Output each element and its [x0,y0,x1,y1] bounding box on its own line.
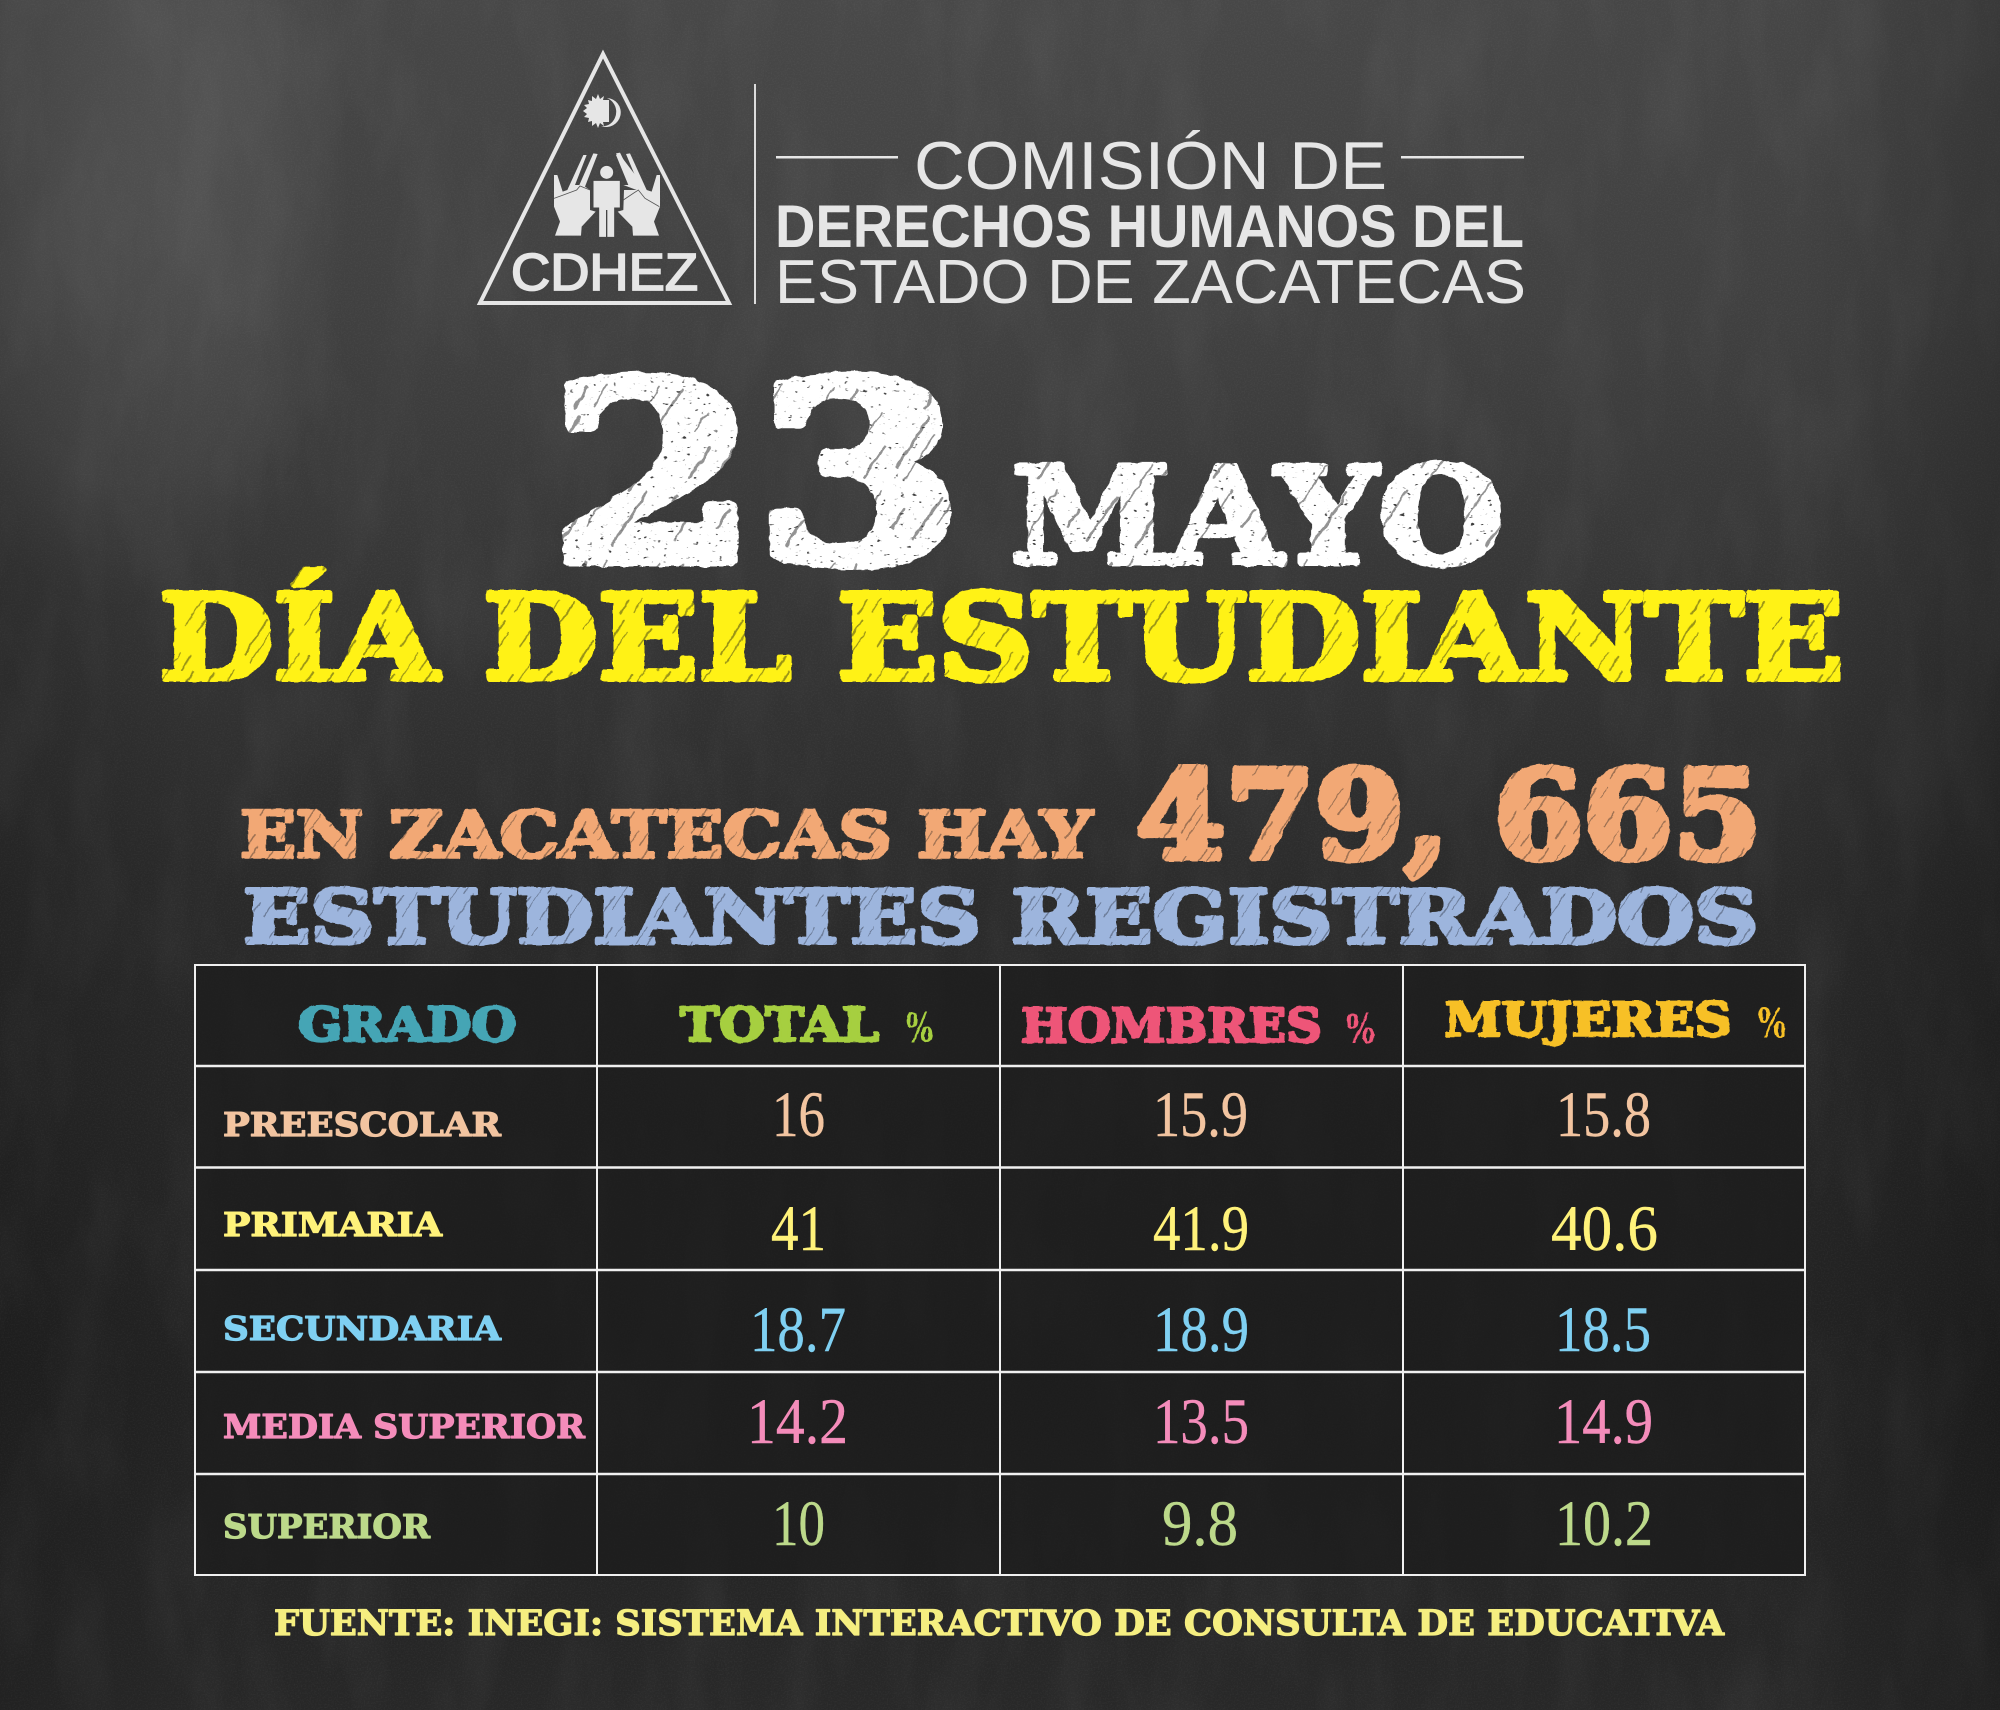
row: primaria: 41.9 [1153,1193,1249,1265]
table header row: HOMBRES [1021,999,1322,1054]
table header row: MUJERES [1444,993,1732,1048]
row: preescolar: PREESCOLAR [223,1105,502,1144]
logo: CDHEZ triangle [480,54,729,303]
row: preescolar: 15.9 [1153,1079,1248,1151]
row: secundaria: 18.9 [1153,1294,1249,1366]
row: superior [223,1488,1653,1560]
row: preescolar [223,1079,1651,1151]
divider: logo and name [754,84,756,304]
table header row: TOTAL [680,998,879,1053]
heading: institution name: COMISIÓN DE [914,128,1387,204]
footer: source: FUENTE: INEGI: SISTEMA INTERACTIVO DE CONSULTA DE EDUCATIVA [274,1603,1725,1644]
table header row: % [1346,1006,1375,1053]
row: primaria: 40.6 [1551,1193,1658,1265]
row: preescolar: 16 [772,1079,825,1151]
row: media superior: MEDIA SUPERIOR [223,1407,586,1446]
row: preescolar: 15.8 [1556,1079,1651,1151]
row: secundaria: 18.5 [1555,1294,1651,1366]
table panel [194,964,1806,1575]
row: media superior: 14.2 [747,1386,848,1458]
row: superior: 10 [772,1488,825,1560]
table: grado statistics [194,964,1806,1575]
row: primaria [223,1193,1658,1265]
row: media superior [223,1386,1653,1458]
table grid [195,965,1805,1575]
heading: institution name: ESTADO DE ZACATECAS [775,248,1526,317]
row: superior: 9.8 [1162,1488,1238,1560]
row: media superior: 13.5 [1153,1386,1249,1458]
logo wordmark CDHEZ: CDHEZ [511,244,698,302]
heading: institution name [775,128,1526,317]
row: secundaria [223,1294,1651,1366]
icon: hands protecting a person [554,153,660,238]
table header row: % [1758,1000,1786,1047]
title: DÍA DEL ESTUDIANTE: DÍA DEL ESTUDIANTE [159,568,1844,707]
big number: 479, 665: 479, 665 [1136,743,1762,887]
row: superior: SUPERIOR [223,1507,431,1546]
row: secundaria: SECUNDARIA [223,1309,501,1348]
table header row: % [906,1005,933,1052]
row: media superior: 14.9 [1554,1386,1653,1458]
table header row: GRADO [298,998,517,1053]
row: primaria: 41 [771,1193,826,1265]
heading: institution name: DERECHOS HUMANOS DEL [775,193,1524,260]
row: superior: 10.2 [1555,1488,1653,1560]
icon: sun and moon [583,94,621,128]
row: secundaria: 18.7 [750,1294,846,1366]
text: ESTUDIANTES REGISTRADOS: ESTUDIANTES REGISTRADOS [243,875,1758,961]
table header row [298,993,1786,1054]
text: EN ZACATECAS HAY: EN ZACATECAS HAY [240,798,1095,873]
title: 23: 23 [551,330,962,618]
row: primaria: PRIMARIA [223,1205,442,1244]
title: MAYO: MAYO [1011,437,1504,595]
